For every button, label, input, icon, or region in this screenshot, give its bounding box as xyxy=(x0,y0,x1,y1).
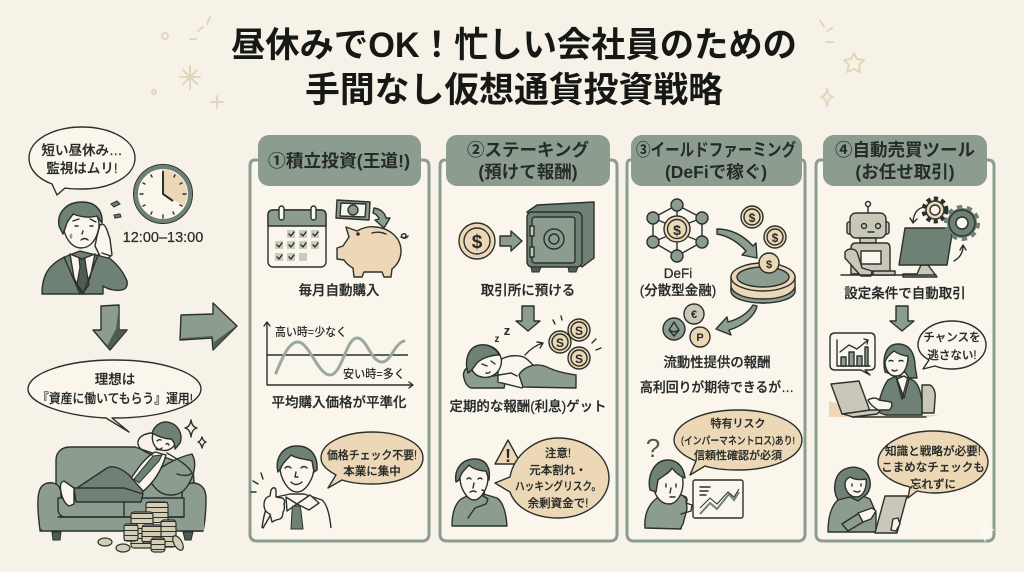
speech bubble: caution: 注意! xyxy=(545,446,571,460)
pillow xyxy=(148,454,195,495)
icons: reward tokens: P xyxy=(696,332,704,344)
label: lunch time: 12:00–13:00 xyxy=(123,230,203,246)
arrow: rewards xyxy=(716,305,757,335)
decoration: right sparkles xyxy=(820,20,864,106)
label: 取引所に預ける xyxy=(481,283,575,298)
arrow: into pool xyxy=(717,229,757,258)
speech bubble: don't miss the chance xyxy=(918,321,986,369)
label: 毎月自動購入 xyxy=(298,282,380,298)
icons: reward tokens xyxy=(663,304,710,347)
icons: reward coins: S xyxy=(575,352,583,366)
heading xyxy=(823,135,987,186)
heading: ①積立投資(王道!) xyxy=(268,151,410,171)
icon: dollar coin xyxy=(459,223,495,259)
speech bubble: short lunch break: 監視はムリ! xyxy=(46,161,118,176)
speech bubble: caution: 余剰資金で! xyxy=(528,496,588,510)
heading: ②ステーキング xyxy=(467,140,589,160)
icons: gears xyxy=(910,199,977,261)
figure: woman with tablet xyxy=(828,467,907,533)
label: 平均購入価格が平準化 xyxy=(272,394,407,410)
chart: price wave: 安い時=多く xyxy=(343,366,405,381)
speech bubble: short lunch break: 短い昼休み… xyxy=(42,143,122,158)
reclining man xyxy=(60,422,192,506)
watermark sparkle xyxy=(975,518,995,543)
icon: question mark: ? xyxy=(646,433,660,463)
icon: chart card xyxy=(693,480,743,518)
heading: (DeFiで稼ぐ) xyxy=(665,162,767,182)
label: DeFi xyxy=(664,266,692,281)
speech bubble: no price checks: 価格チェック不要! xyxy=(327,448,417,462)
speech bubble: don't miss the chance: 逃さない! xyxy=(927,348,977,362)
speech bubble: caution xyxy=(495,438,609,518)
sofa xyxy=(38,447,206,540)
icon: calendar xyxy=(268,206,326,267)
chart: price wave xyxy=(264,322,413,388)
heading: ③イールドファーミング xyxy=(636,140,796,160)
panel: intro column xyxy=(29,127,203,294)
icons: falling coins: $ xyxy=(749,211,756,225)
heading xyxy=(631,135,802,186)
icon: liquidity pool xyxy=(731,253,795,303)
arrow: down xyxy=(516,306,540,331)
label: 定期的な報酬(利息)ゲット xyxy=(450,398,606,414)
panel: 4 automated trading xyxy=(816,135,995,543)
sleep mark: z xyxy=(494,334,500,345)
chart: price wave: 高い時=少なく xyxy=(275,324,347,339)
heading xyxy=(258,135,421,186)
icons: falling coins xyxy=(741,206,786,248)
heading: (預けて報酬) xyxy=(478,162,578,182)
decoration: left sparkles xyxy=(152,17,223,108)
speech bubble: knowledge needed: 知識と戦略が必要! xyxy=(885,444,981,458)
speech bubble: knowledge needed: こまめなチェックも xyxy=(881,461,985,474)
figure: worried person xyxy=(452,459,507,526)
speech bubble: ideal xyxy=(28,360,201,432)
labels: 流動性提供の報酬 xyxy=(664,355,770,370)
icons: reward coins xyxy=(549,316,601,369)
icon: DeFi network xyxy=(647,199,708,262)
figure: puzzled person xyxy=(645,460,692,529)
figure: sleeping person xyxy=(463,345,576,388)
sleep mark: z xyxy=(504,323,511,338)
icon: banknote xyxy=(336,200,370,220)
speech bubble: caution: 元本割れ・ xyxy=(529,463,587,477)
speech bubble: specific risk xyxy=(674,410,802,475)
arrow: down xyxy=(890,306,914,331)
icon: clock xyxy=(134,164,192,224)
sleep mark xyxy=(494,323,511,345)
panel: 2 staking xyxy=(440,135,617,541)
icons: falling coins: $ xyxy=(772,231,779,245)
icon: monitor xyxy=(841,228,953,277)
figure: worried office worker xyxy=(42,201,127,294)
icon: DeFi network: $ xyxy=(673,222,681,238)
title: 手間なし仮想通貨投資戦略 xyxy=(305,71,723,110)
panel: 1 dollar cost averaging xyxy=(250,135,429,541)
speech bubble: specific risk: 信頼性確認が必須 xyxy=(694,448,782,462)
icon: piggy bank xyxy=(337,227,408,277)
icon: warning: ! xyxy=(505,446,511,466)
label: 設定条件で自動取引 xyxy=(844,285,966,301)
arrow: note to piggy bank xyxy=(373,208,390,228)
coin stacks xyxy=(98,502,185,552)
speech bubble: ideal: 『資産に働いてもらう』運用! xyxy=(37,391,193,406)
panel: 3 yield farming xyxy=(627,135,805,541)
sparkles xyxy=(185,420,206,448)
labels: 高利回りが期待できるが… xyxy=(640,379,794,395)
title: 昼休みでOK！忙しい会社員のための xyxy=(231,26,797,65)
icons: reward tokens: € xyxy=(691,309,697,321)
icon: robot xyxy=(845,202,890,276)
speech bubble: specific risk: (インパーマネントロス)あり! xyxy=(681,435,795,447)
figure: smiling man with thumbs-up xyxy=(251,446,331,529)
arrow: down xyxy=(93,305,127,350)
speech bubble: caution: ハッキングリスク。 xyxy=(515,479,601,493)
speech bubble: don't miss the chance: チャンスを xyxy=(923,331,981,344)
icon: warning xyxy=(495,440,521,466)
illustration: relaxing on sofa with coins xyxy=(38,420,206,552)
speech bubble: no price checks: 本業に集中 xyxy=(343,464,401,478)
speech bubble: short lunch break xyxy=(29,127,135,195)
speech bubble: specific risk: 特有リスク xyxy=(710,416,766,430)
label xyxy=(640,266,716,298)
labels xyxy=(640,355,794,395)
speech bubble: ideal: 理想は xyxy=(95,372,135,387)
icons: reward coins: S xyxy=(575,324,583,338)
label: (分散型金融) xyxy=(640,283,716,298)
speech bubble: knowledge needed: 忘れずに xyxy=(910,478,956,491)
speech bubble: no price checks xyxy=(321,432,423,488)
heading xyxy=(446,135,610,186)
heading: (お任せ取引) xyxy=(855,162,955,182)
heading: ④自動売買ツール xyxy=(835,140,975,160)
arrow: right to panels xyxy=(180,303,237,350)
icon: liquidity pool: $ xyxy=(766,259,772,271)
arrow: coin to safe xyxy=(500,231,522,251)
speech bubble: knowledge needed xyxy=(878,431,988,498)
icons: reward coins: S xyxy=(556,336,564,350)
arrow: to reward xyxy=(525,342,543,355)
illustration: woman at laptop xyxy=(829,344,940,417)
icon: safe xyxy=(527,202,594,272)
icon: chart bubble xyxy=(830,333,875,375)
icon: dollar coin: $ xyxy=(472,232,483,253)
title xyxy=(231,26,797,110)
